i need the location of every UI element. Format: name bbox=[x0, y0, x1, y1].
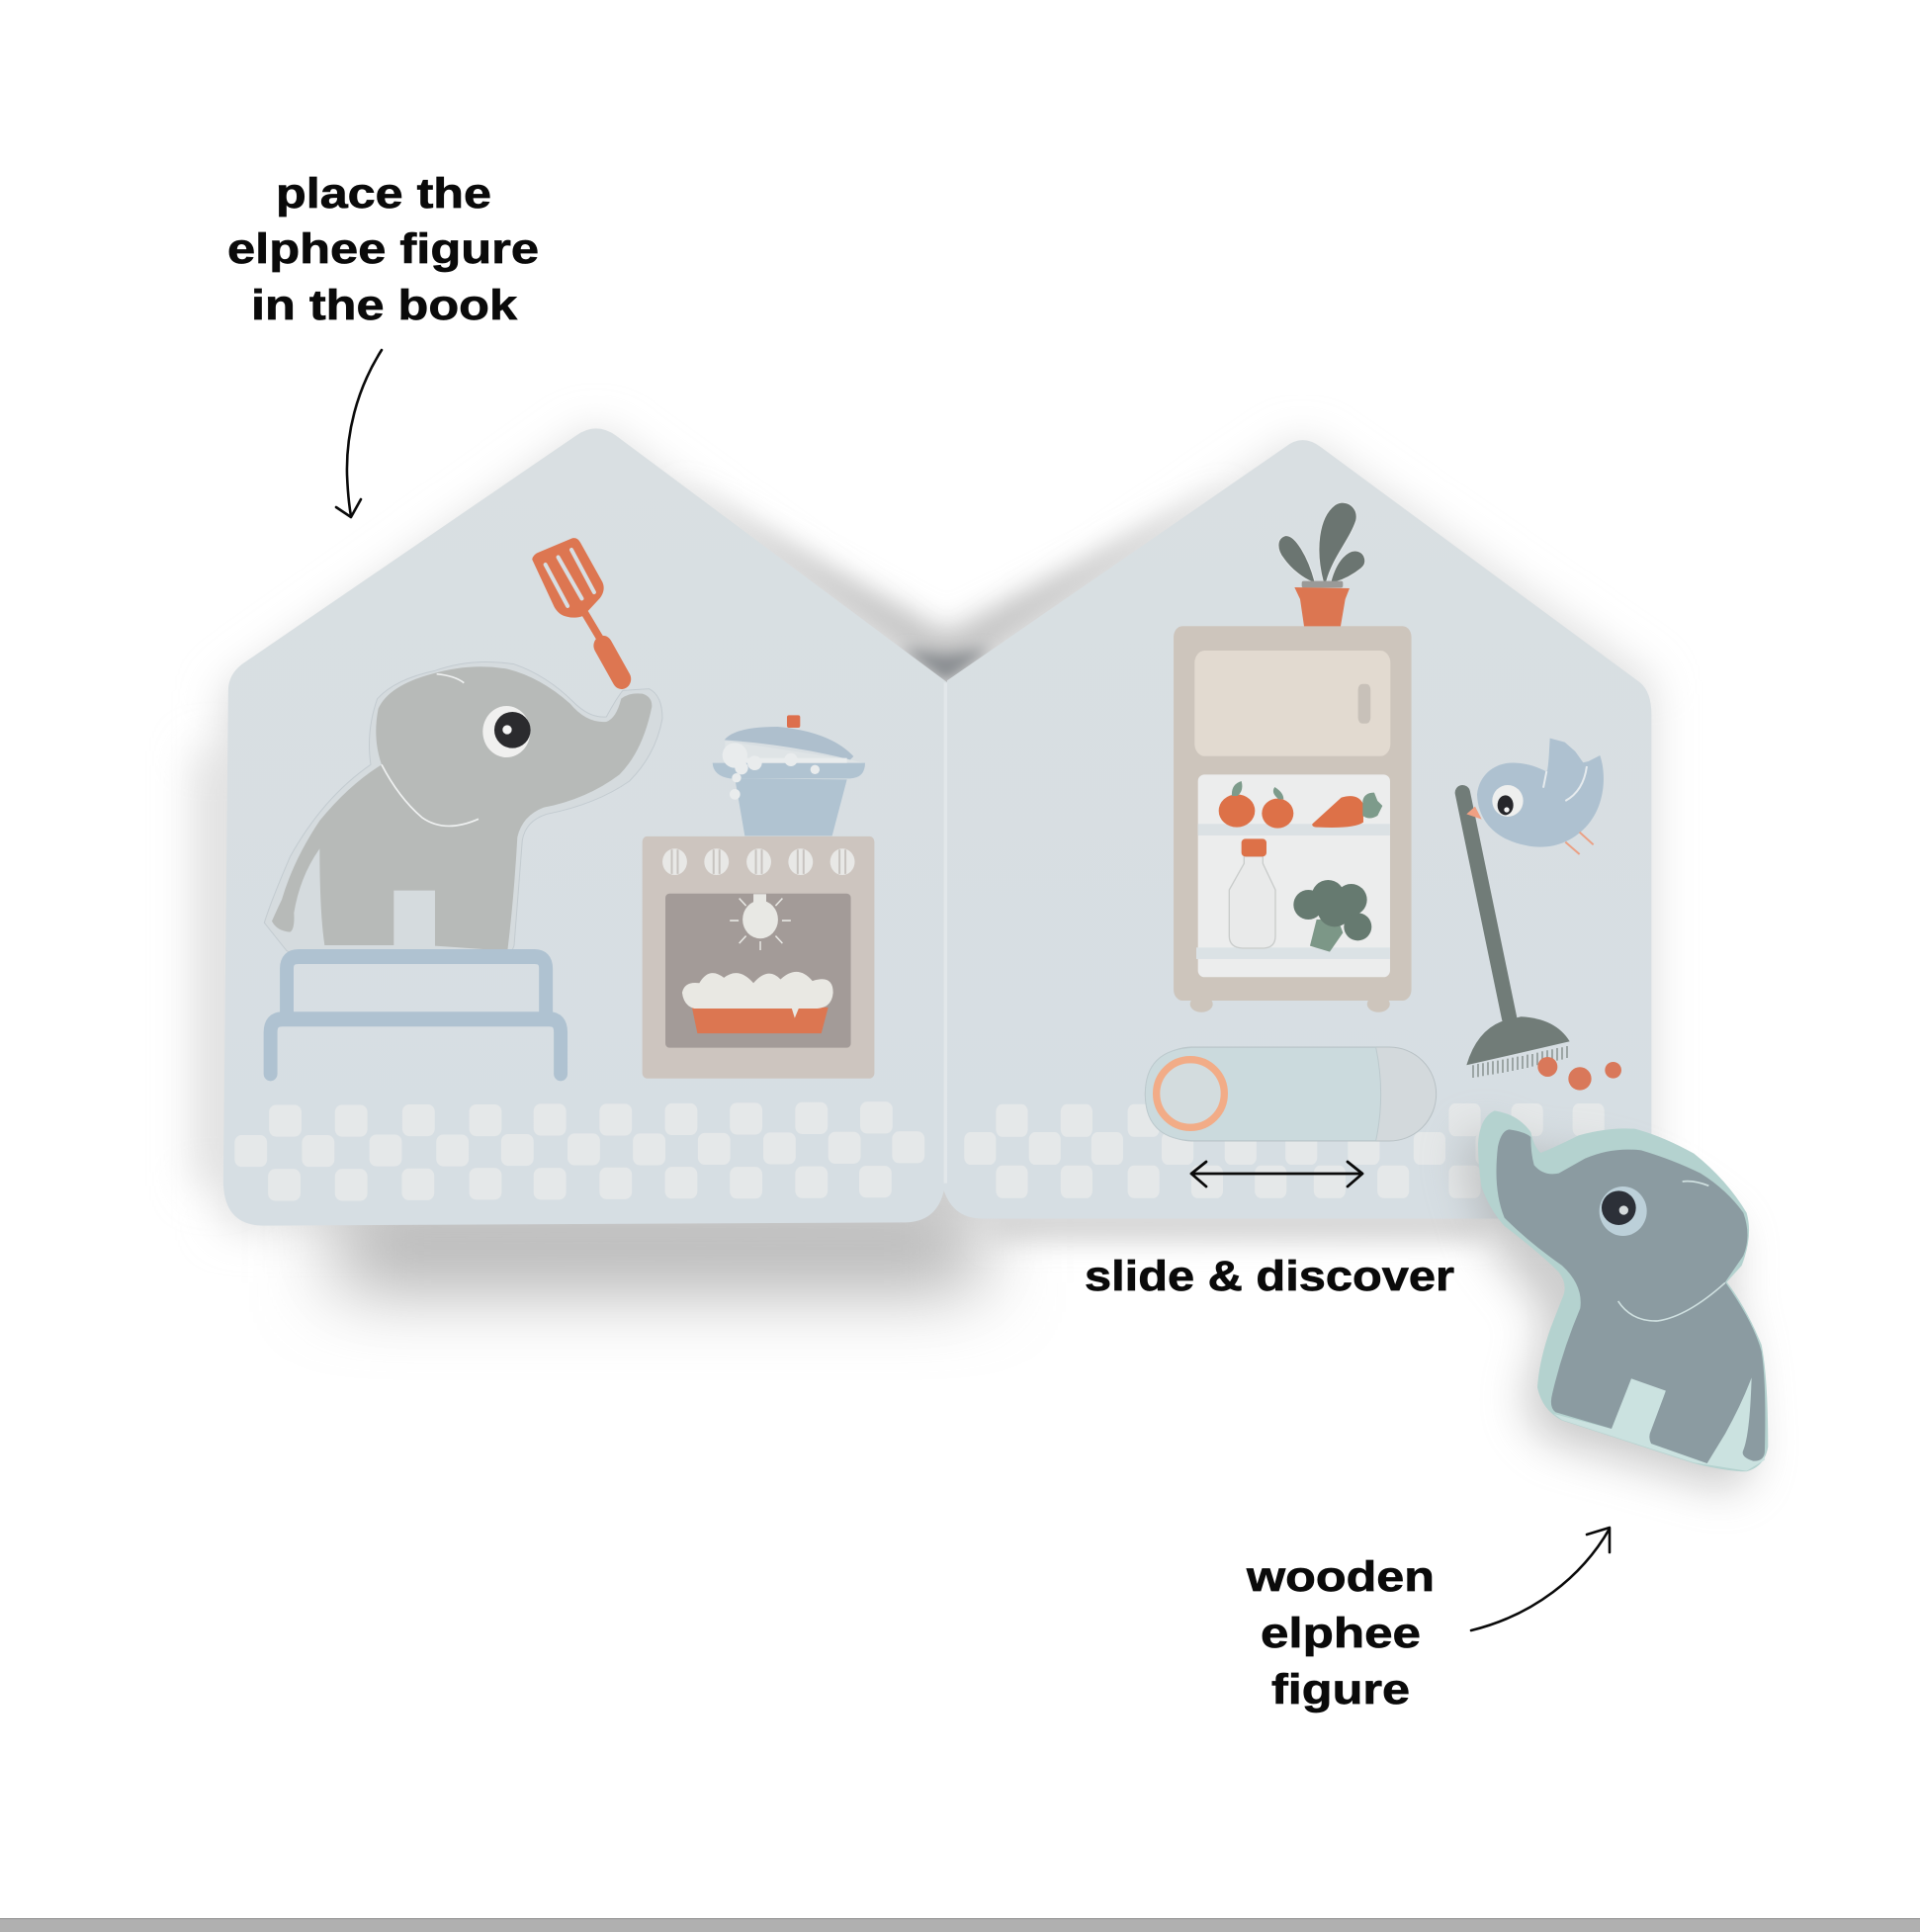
stove bbox=[643, 836, 874, 1079]
right page artwork bbox=[942, 440, 1651, 1218]
pot foam bbox=[723, 743, 847, 800]
cut-out slot bbox=[264, 661, 662, 962]
figure light foot area bbox=[1554, 1377, 1765, 1471]
callout: wooden figure: figure bbox=[1271, 1666, 1410, 1713]
callout: place the figure: in the book bbox=[251, 282, 517, 329]
wooden elephant figure bbox=[1478, 1110, 1768, 1471]
book shadows bbox=[198, 428, 1651, 1285]
spine bbox=[944, 682, 947, 1184]
fridge door bbox=[1194, 651, 1390, 756]
arrow to figure bbox=[1471, 1528, 1610, 1630]
floor tiles left bbox=[234, 1101, 924, 1200]
boiling pot bbox=[713, 715, 865, 835]
elephant body bbox=[272, 666, 652, 951]
bird bbox=[1477, 739, 1604, 854]
fridge bbox=[1174, 626, 1412, 1012]
fridge interior bbox=[1196, 774, 1390, 977]
carrot bbox=[1312, 793, 1382, 828]
callout: wooden figure: elphee bbox=[1261, 1610, 1421, 1657]
broom bbox=[1462, 793, 1570, 1078]
elephant cut-out bbox=[264, 661, 662, 962]
floor tiles right bbox=[964, 1103, 1605, 1198]
elephant eye bbox=[482, 706, 531, 757]
callout: wooden figure: wooden bbox=[1246, 1553, 1435, 1601]
apples bbox=[1219, 781, 1293, 829]
callout: place the figure bbox=[227, 170, 539, 329]
page: left house bbox=[223, 428, 948, 1226]
oven window bbox=[665, 894, 851, 1048]
potted plant bbox=[1278, 502, 1365, 626]
double arrow bbox=[1191, 1162, 1362, 1186]
figure face bbox=[1496, 1129, 1765, 1463]
dust dots bbox=[1537, 1057, 1621, 1091]
left page artwork bbox=[223, 428, 948, 1226]
slider bbox=[1145, 1047, 1437, 1141]
pie bbox=[682, 972, 833, 1033]
milk bottle bbox=[1229, 838, 1275, 948]
page: right house bbox=[942, 440, 1651, 1218]
slider ring bbox=[1157, 1060, 1224, 1127]
stool bbox=[271, 956, 561, 1074]
callout: place the figure: elphee figure bbox=[227, 225, 539, 273]
stove knobs bbox=[662, 848, 855, 875]
callout: slide and discover: slide & discover bbox=[1085, 1253, 1454, 1300]
figure body side bbox=[1478, 1110, 1768, 1471]
spatula bbox=[532, 538, 622, 679]
oven bulb bbox=[730, 894, 791, 950]
figure eye bbox=[1600, 1186, 1647, 1236]
wooden elephant shadow bbox=[1463, 1130, 1753, 1491]
arrow to book bbox=[336, 350, 382, 517]
stove and stool bbox=[234, 836, 924, 1200]
fridge handle bbox=[1358, 684, 1370, 724]
callout: wooden figure bbox=[1246, 1553, 1435, 1713]
bottom grey bar bbox=[0, 1918, 1920, 1932]
callout: place the figure: place the bbox=[276, 170, 491, 218]
bird and broom bbox=[1462, 739, 1621, 1091]
broccoli bbox=[1293, 880, 1371, 952]
